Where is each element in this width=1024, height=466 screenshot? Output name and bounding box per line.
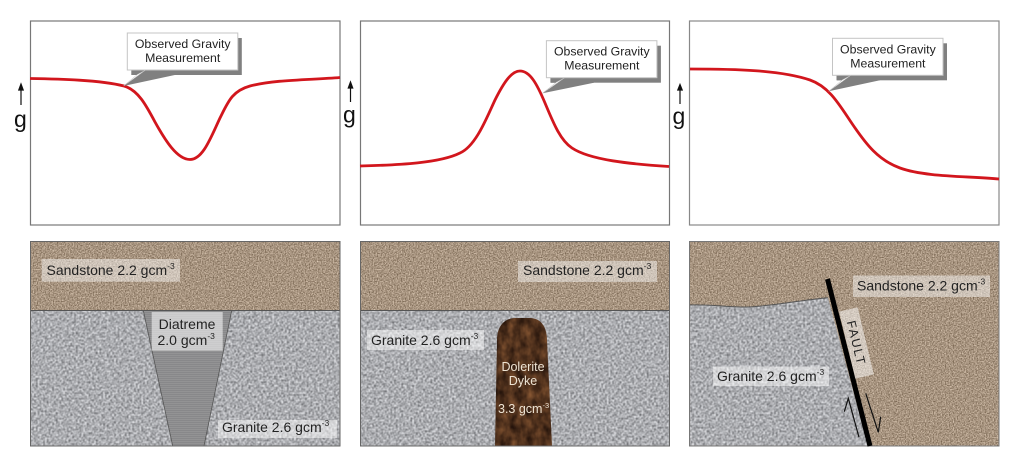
callout: observed gravity measurement: Observed Gravity	[840, 42, 937, 56]
granite layer	[360, 310, 670, 446]
label: dolerite dyke: Dolerite	[501, 360, 545, 374]
arrow: upthrown side half-arrow	[844, 398, 859, 437]
axis label: g: g	[672, 103, 685, 129]
chart frame	[30, 21, 340, 225]
label: granite: -3	[322, 418, 329, 428]
label: sandstone	[518, 261, 657, 282]
layer boundary	[360, 310, 670, 312]
label: dolerite dyke: 3.3 gcm	[498, 402, 542, 416]
label: granite: Granite 2.6 gcm	[717, 368, 817, 384]
panel: dolerite dyke cross-section	[360, 242, 670, 446]
dolerite dyke body	[495, 318, 552, 446]
frame	[30, 242, 340, 446]
label: dolerite dyke: -3	[542, 401, 549, 410]
label: sandstone	[42, 259, 180, 282]
chart frame	[690, 21, 999, 225]
label: granite: Granite 2.6 gcm	[371, 332, 471, 348]
arrow: g axis up	[678, 84, 682, 104]
label: dolerite dyke: Dyke	[509, 374, 537, 388]
granite layer	[30, 310, 340, 446]
label: granite: -3	[817, 367, 824, 377]
arrow: g axis up	[348, 82, 353, 102]
label: sandstone: -3	[644, 261, 651, 271]
gravity curve: high over dyke	[360, 71, 669, 166]
label: diatreme	[152, 312, 223, 351]
panel: fault cross-section	[690, 242, 999, 446]
callout: observed gravity measurement: Observed Gravity	[554, 45, 650, 59]
granite block	[690, 298, 868, 446]
label: fault: FAULT	[844, 319, 868, 367]
sandstone layer	[30, 242, 340, 310]
label: sandstone: Sandstone 2.2 gcm	[46, 262, 167, 278]
fault line	[828, 279, 870, 446]
callout: observed gravity measurement	[829, 38, 947, 91]
arrow: downthrown side half-arrow	[866, 393, 881, 432]
sandstone background	[690, 242, 999, 446]
label: granite: -3	[471, 331, 478, 341]
label: fault	[839, 307, 874, 379]
label: sandstone: Sandstone 2.2 gcm	[523, 262, 644, 278]
granite top contact	[690, 298, 828, 307]
frame	[690, 242, 999, 446]
callout: observed gravity measurement: Measurement	[145, 51, 221, 65]
label: sandstone	[853, 276, 990, 297]
diatreme body	[143, 310, 232, 446]
arrow: g axis up	[19, 84, 23, 105]
gravity curve: low over diatreme	[30, 78, 340, 160]
label: granite: Granite 2.6 gcm	[222, 419, 322, 435]
layer boundary	[30, 310, 340, 312]
label: granite	[218, 418, 337, 438]
panel: diatreme gravity profile	[14, 21, 340, 225]
label: dolerite dyke	[498, 360, 549, 416]
callout: observed gravity measurement: Measurement	[850, 56, 926, 70]
panel: dolerite dyke gravity profile	[343, 21, 670, 225]
callout: observed gravity measurement	[124, 33, 242, 86]
callout: observed gravity measurement: Observed Gravity	[135, 37, 231, 51]
label: sandstone: -3	[978, 276, 985, 286]
label: diatreme: -3	[207, 331, 215, 341]
gravity curve: step across fault	[690, 69, 999, 179]
label: diatreme: Diatreme	[159, 316, 216, 332]
label: granite	[367, 330, 484, 350]
label: sandstone: Sandstone 2.2 gcm	[857, 278, 978, 294]
chart frame	[360, 21, 670, 225]
label: sandstone: -3	[167, 261, 175, 271]
axis label: g: g	[14, 106, 27, 132]
callout: observed gravity measurement	[543, 41, 661, 93]
panel: diatreme cross-section	[30, 242, 340, 446]
frame	[360, 242, 670, 446]
label: diatreme: 2.0 gcm	[158, 332, 207, 348]
panel: fault gravity profile	[672, 21, 999, 225]
axis label: g: g	[343, 102, 356, 128]
callout: observed gravity measurement: Measurement	[564, 59, 640, 73]
sandstone layer	[360, 242, 670, 310]
